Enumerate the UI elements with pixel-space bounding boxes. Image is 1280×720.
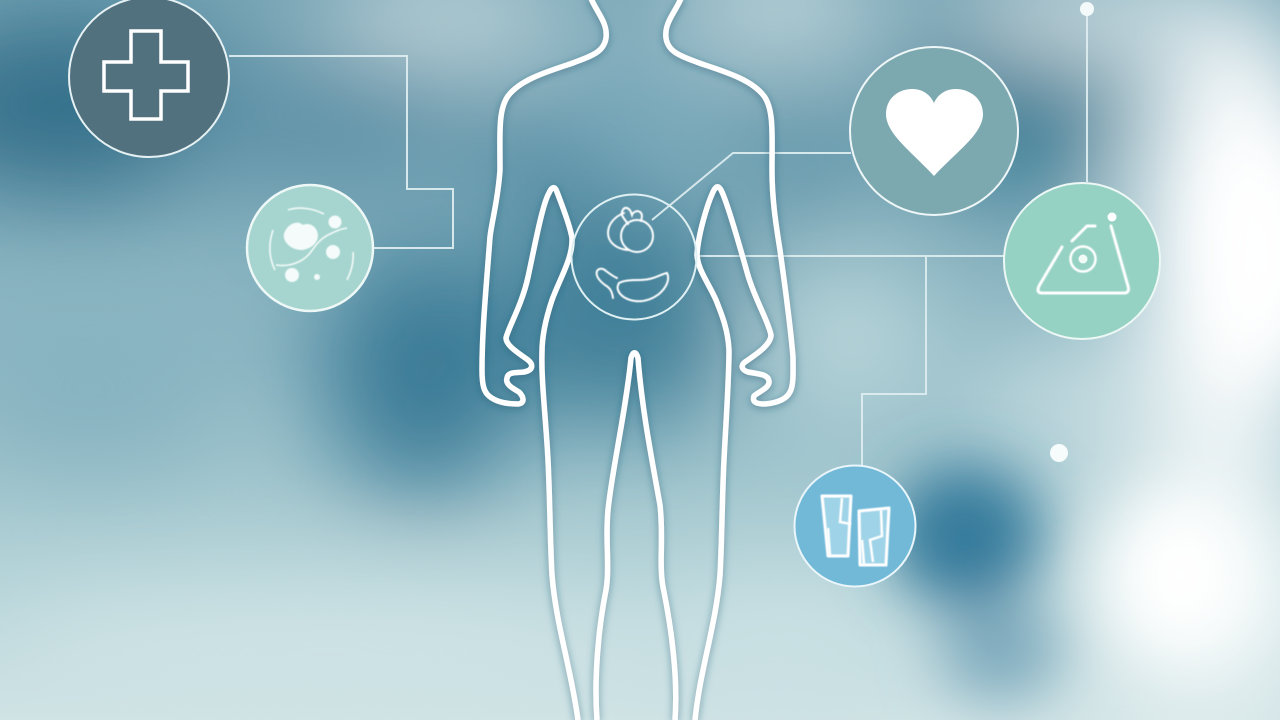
dot: top right [1080, 2, 1094, 16]
icon: flask device [1004, 183, 1160, 339]
human body outline [482, 0, 793, 720]
icon: medical cross [69, 0, 229, 157]
icon: organs circle [572, 194, 696, 320]
icon: heart [850, 47, 1018, 215]
dot: lower right [1050, 444, 1068, 462]
icon: cells [247, 185, 373, 311]
connector lines [229, 8, 1087, 466]
icon: containers [794, 466, 916, 586]
